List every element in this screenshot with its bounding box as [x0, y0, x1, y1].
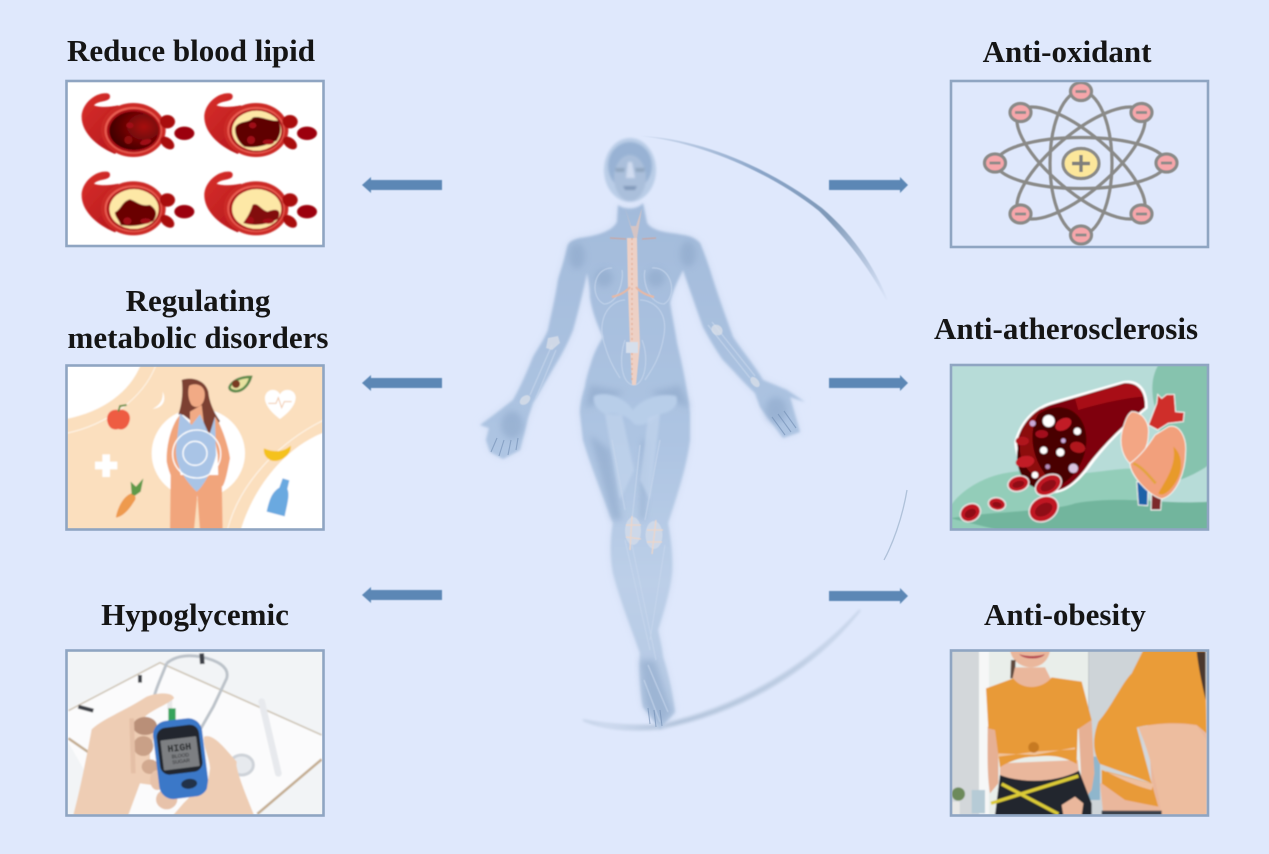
knees — [626, 516, 663, 554]
glucose meter: HIGH — [167, 741, 192, 755]
woman — [167, 379, 230, 530]
arrow: right 1 — [829, 177, 908, 193]
thumb over meter — [204, 736, 237, 790]
human body illustration — [480, 138, 805, 729]
panel: anti-oxidant — [951, 81, 1208, 247]
spine — [610, 208, 656, 385]
left hand — [73, 693, 174, 815]
reflection: person — [986, 650, 1094, 815]
organ and bone lines — [530, 268, 755, 722]
icon: moon — [153, 392, 164, 409]
arrow: left 3 — [362, 587, 442, 603]
artery: healthy — [82, 93, 194, 157]
heading: Anti-obesity: Anti-obesity — [984, 597, 1146, 632]
arrow: left 2 — [362, 375, 442, 391]
artery: moderate plaque — [82, 172, 194, 235]
icon: apple — [107, 405, 130, 429]
hips and pelvis — [594, 394, 677, 500]
heading: Hypoglycemic: Hypoglycemic — [101, 597, 289, 632]
heading: Anti-oxidant: Anti-oxidant — [983, 34, 1152, 69]
metabolism cycle — [173, 430, 221, 478]
joints — [518, 322, 762, 549]
stethoscope — [78, 653, 253, 775]
glucose meter: BLOOD — [171, 752, 190, 760]
white background shapes — [66, 365, 324, 530]
body silhouette glow — [480, 203, 805, 729]
arc: circle behind the body — [583, 136, 907, 730]
heading: Anti-atherosclerosis: Anti-atherosclerosis — [934, 311, 1198, 346]
glucose meter — [151, 717, 210, 801]
fingers — [491, 411, 796, 727]
arrow: right 2 — [829, 375, 908, 391]
icon: banana — [264, 446, 291, 461]
nucleus — [1063, 148, 1099, 178]
pen — [262, 702, 278, 773]
clipboard — [66, 662, 324, 815]
panel: anti-atherosclerosis — [951, 365, 1209, 530]
head — [604, 138, 656, 202]
heading: Regulating metabolic disorders: Regulating — [126, 283, 271, 318]
icon: plus — [95, 454, 117, 477]
shading — [501, 241, 787, 725]
blood vessel — [1014, 380, 1148, 494]
electrons — [984, 82, 1177, 244]
panel: regulating metabolic disorders — [66, 365, 324, 530]
artery: severe plaque — [204, 172, 317, 235]
artery: early plaque — [204, 93, 317, 157]
icon: heart — [265, 390, 296, 419]
heart — [1121, 394, 1186, 510]
test strip — [167, 700, 176, 722]
torso, arms and legs — [480, 203, 805, 729]
atom diagram — [984, 82, 1177, 244]
icon: carrot — [116, 478, 143, 518]
background waves — [951, 365, 1209, 530]
heading: Regulating metabolic disorders: metabolic disorders — [68, 320, 328, 355]
arrow: right 3 — [829, 588, 908, 604]
icon: avocado — [228, 376, 253, 393]
heading: Reduce blood lipid: Reduce blood lipid — [67, 33, 315, 68]
spilled blood cells — [958, 472, 1064, 524]
arrow: left 1 — [362, 177, 442, 193]
right hand — [150, 762, 254, 815]
panel: hypoglycemic — [66, 650, 324, 816]
blood cells inside vessel — [1015, 415, 1086, 478]
panel: anti-obesity — [951, 650, 1209, 816]
mirror — [952, 652, 1101, 814]
panel: reduce blood lipid — [66, 81, 324, 246]
icon: water bottle — [267, 478, 289, 516]
glucose meter: SUGAR — [172, 758, 191, 766]
foreground person — [1094, 650, 1207, 815]
